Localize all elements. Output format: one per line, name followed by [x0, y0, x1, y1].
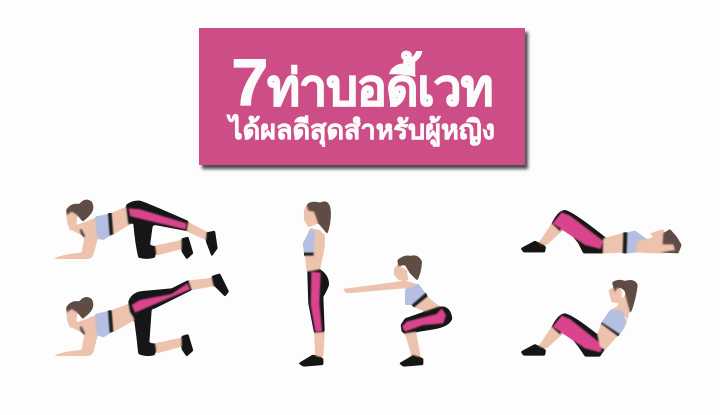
figure: standing [298, 201, 331, 367]
figure: donkey kick, leg raised [53, 273, 229, 357]
subtitle: ได้ผลดีสุดสำหรับผู้หญิง [229, 115, 495, 145]
title banner [199, 28, 525, 165]
figure: sit-up raised [521, 280, 638, 357]
figure: sit-up lying down [521, 210, 682, 253]
figure: squat [343, 255, 452, 367]
title: main heading: 7ท่าบอดี้เวท [231, 45, 493, 119]
figure: donkey kick, leg level [53, 200, 218, 259]
